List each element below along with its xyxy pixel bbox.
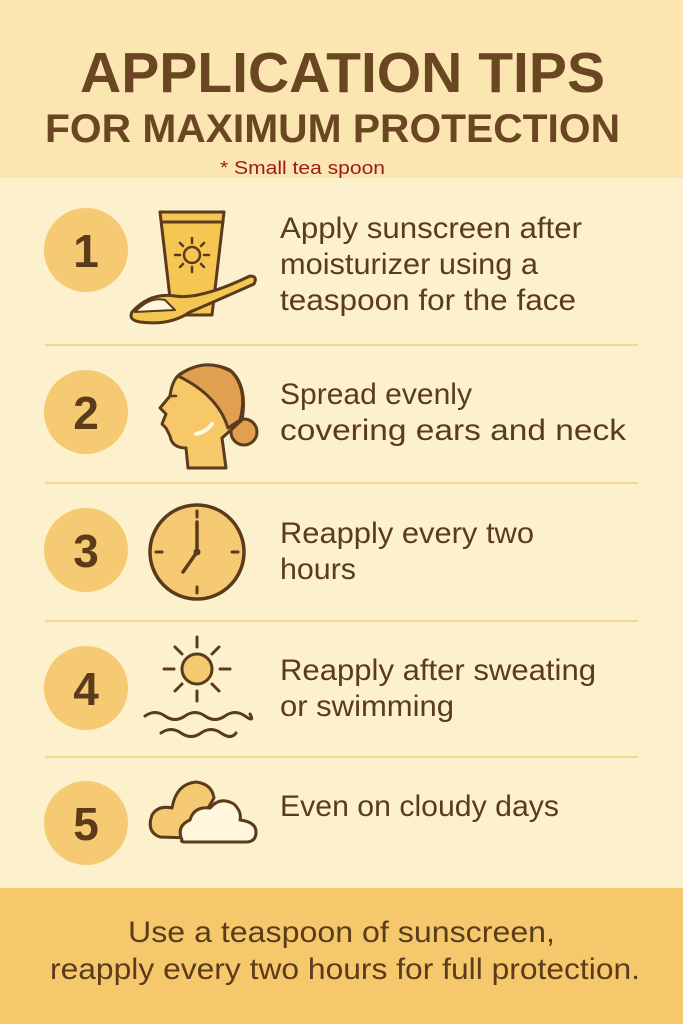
icon: clouds — [150, 782, 256, 842]
footer text: Use a teaspoon of sunscreen, — [128, 916, 555, 949]
step 4 — [44, 637, 596, 736]
text 1: Apply sunscreen after — [280, 212, 582, 245]
note: small tea spoon: * Small tea spoon — [220, 158, 385, 178]
text 2: Spread evenly — [280, 378, 472, 411]
text 4: Reapply after sweating — [280, 654, 596, 687]
text 2: covering ears and neck — [280, 414, 627, 447]
text 4: or swimming — [280, 690, 454, 723]
text 3: Reapply every two — [280, 517, 534, 550]
step 3 — [44, 505, 534, 599]
number circle 2: 2 — [73, 387, 99, 439]
number circle 2 — [44, 370, 128, 454]
text 1: teaspoon for the face — [280, 284, 576, 317]
icon: face profile — [160, 365, 257, 468]
text 3 — [280, 517, 534, 586]
title — [45, 41, 620, 151]
icon: sun over waves — [145, 637, 252, 736]
number circle 5: 5 — [73, 798, 99, 850]
number circle 1 — [44, 208, 128, 292]
number circle 1: 1 — [73, 225, 99, 277]
number circle 5 — [44, 781, 128, 865]
step 5 — [44, 781, 559, 865]
step 1 — [44, 208, 582, 323]
text 4 — [280, 654, 596, 723]
icon: sunscreen tube and spoon — [131, 212, 255, 323]
icon: clock — [150, 505, 244, 599]
number circle 4 — [44, 646, 128, 730]
title: FOR MAXIMUM PROTECTION — [45, 107, 620, 151]
step 2 — [44, 365, 627, 468]
text 3: hours — [280, 553, 356, 586]
text 2 — [280, 378, 627, 447]
text 1 — [280, 212, 582, 317]
number circle 3 — [44, 508, 128, 592]
number circle 3: 3 — [73, 525, 99, 577]
header band — [0, 0, 683, 178]
title: APPLICATION TIPS — [80, 41, 605, 105]
footer text — [50, 916, 640, 986]
footer band — [0, 888, 683, 1024]
text 5: Even on cloudy days — [280, 790, 559, 823]
text 1: moisturizer using a — [280, 248, 538, 281]
footer text: reapply every two hours for full protection. — [50, 953, 640, 986]
number circle 4: 4 — [73, 663, 99, 715]
